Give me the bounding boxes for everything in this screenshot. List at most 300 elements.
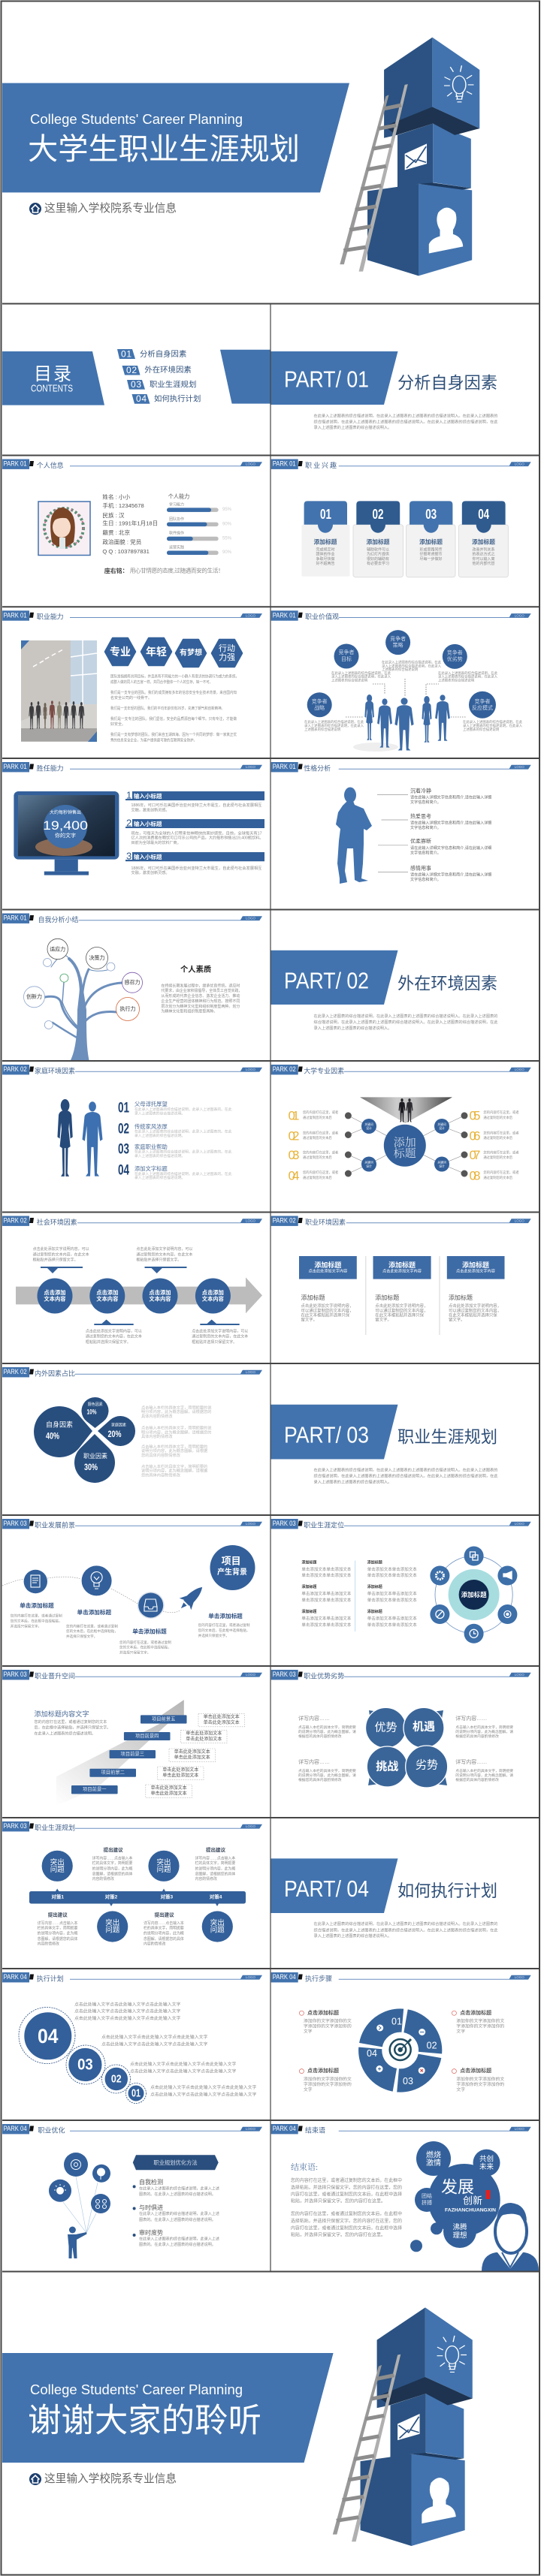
slide header bbox=[271, 610, 531, 621]
motto: 座右铭： bbox=[104, 567, 128, 574]
part title: 外在环境因素 bbox=[397, 975, 497, 993]
petal labels: 20% bbox=[108, 1429, 122, 1439]
swot labels bbox=[374, 1721, 438, 1773]
column text: 可以通过复制您的文本内容， bbox=[375, 1308, 428, 1314]
strategy labels bbox=[51, 1894, 222, 1900]
part description: 综合描述说明，在此录入上述图表的上述图表的综合描述说明入。在此录入上述图表的综合描述说明，在此 bbox=[314, 1473, 498, 1479]
swot titles: 详写内容…… bbox=[298, 1715, 330, 1722]
slide header bbox=[2, 1216, 262, 1226]
slide header: PARK 04 bbox=[273, 2125, 296, 2133]
ability bars: 团队协作 bbox=[169, 517, 184, 522]
ability bars: 55% bbox=[222, 536, 232, 541]
slide header bbox=[271, 1972, 531, 1982]
swot titles: 详写内容…… bbox=[455, 1715, 487, 1722]
method text bbox=[139, 2186, 219, 2247]
value labels: 竞争者 bbox=[475, 698, 490, 704]
slide header: PARK 04 bbox=[273, 1973, 296, 1981]
pinwheel bbox=[358, 2008, 443, 2092]
slide header: 执行计划 bbox=[37, 1974, 64, 1982]
positioning titles: 添加标题 bbox=[367, 1609, 382, 1614]
part title: 如何执行计划 bbox=[397, 1882, 497, 1900]
execution text: 点击此处输入文字点击此处输入文字点击此处输入文字 bbox=[130, 2068, 236, 2074]
petal labels: 40% bbox=[46, 1431, 59, 1442]
number captions: 通过复制您的文本后 bbox=[483, 1155, 513, 1160]
family titles bbox=[134, 1101, 168, 1172]
dotted path bbox=[2, 1577, 180, 1613]
orange numbers: 08 bbox=[469, 1169, 481, 1183]
icon: cube tower with ladder bbox=[340, 38, 479, 276]
swot text: 的说明分项内容，此为概念图解，请 bbox=[298, 1773, 356, 1778]
slide header: 职业优化 bbox=[38, 2126, 65, 2134]
slide header: 职业兴趣 bbox=[305, 461, 337, 469]
swot text: 根据您的具体内容酌情修改 bbox=[455, 1734, 499, 1739]
callout text: 通过复制您的文本内容，在此文本 bbox=[136, 1252, 192, 1257]
milestone titles bbox=[20, 1601, 243, 1635]
callout text: 点击此处添加文字说明内容，可以 bbox=[86, 1329, 142, 1334]
slide header: PARK 01 bbox=[273, 460, 296, 469]
problem labels bbox=[50, 1857, 225, 1934]
value descriptions: 上述图表的综合描述说明 bbox=[331, 677, 368, 683]
monitor stat: 大约每秒钟售出 bbox=[50, 809, 81, 815]
number captions: 通过复制您的文本后 bbox=[303, 1135, 332, 1140]
ability description: 秀的信息安全企业，为客户提供最可靠的互联网安全防护。 bbox=[110, 737, 197, 743]
note text: 单击此处添加文本 bbox=[151, 1785, 187, 1791]
icon: target bbox=[390, 2039, 411, 2060]
strategy labels: 对策2 bbox=[105, 1894, 118, 1900]
trait list: 文字信息和简介。 bbox=[410, 850, 441, 856]
slide header: LOGO bbox=[515, 613, 524, 617]
suggestion headings: 提出建议 bbox=[104, 1846, 123, 1853]
closing text: 粘贴，并选择只保留文字。您的内容打在这里。 bbox=[291, 2198, 385, 2204]
card 02 bbox=[353, 501, 403, 577]
value labels: 目标 bbox=[341, 655, 352, 662]
personal details: 民族 : 汉 bbox=[102, 511, 125, 519]
pinwheel numbers: 02 bbox=[427, 2041, 437, 2051]
milestone text: 您的文本后，在此框中选择粘贴， bbox=[11, 1619, 62, 1623]
value labels: 反应模式 bbox=[472, 704, 493, 711]
part description: 录入上述图表的上述图表的综合描述说明入。 bbox=[314, 1933, 391, 1939]
positioning titles: 添加标题 bbox=[367, 1559, 382, 1565]
panel: personal info bbox=[2, 459, 262, 574]
circle numbers: 01 bbox=[131, 2087, 141, 2099]
network labels: 关键词 bbox=[437, 1161, 446, 1164]
closing english: College Students' Career Planning bbox=[30, 2382, 243, 2397]
family numbers: 01 bbox=[118, 1101, 129, 1116]
panel: factor share bbox=[2, 1367, 262, 1483]
competence text: 交融，激发创新灵感。 bbox=[131, 808, 169, 812]
competence bars: 2 bbox=[126, 817, 131, 829]
figure holding balloons bbox=[68, 2227, 87, 2258]
value labels: 竞争者 bbox=[338, 649, 355, 655]
column text: 添加标题 bbox=[301, 1294, 325, 1301]
panel: career interest bbox=[271, 459, 531, 577]
milestone titles: 单击添加标题 bbox=[20, 1601, 54, 1609]
slide header: PARK 04 bbox=[4, 1973, 27, 1981]
panel: family environment bbox=[2, 1065, 262, 1180]
card 03: 尽每一步做好 bbox=[419, 556, 443, 562]
swot titles: 详写内容…… bbox=[455, 1758, 487, 1765]
positioning text: 单击添加文本单击添加文本 bbox=[301, 1566, 352, 1572]
petal labels: 30% bbox=[84, 1462, 98, 1472]
note text: 单击此处添加文本 bbox=[151, 1790, 187, 1796]
card 02: 02 bbox=[373, 507, 383, 522]
slide header bbox=[2, 1065, 262, 1074]
silhouettes: couple bbox=[57, 1099, 102, 1177]
network circles bbox=[361, 1119, 449, 1171]
suggestion text: 内容酌情修改 bbox=[92, 1876, 114, 1882]
suggestion text: 念图解，请根据您的具体 bbox=[144, 1936, 184, 1942]
icon: bulb bbox=[91, 1572, 102, 1589]
step titles: 点击添加标题 bbox=[307, 2009, 339, 2016]
contents heading bbox=[31, 364, 73, 393]
dividers bbox=[366, 1256, 440, 1335]
panel: execution steps bbox=[271, 1972, 531, 2092]
value descriptions: 在此录入上述图表的综合描述说明，在此 bbox=[331, 670, 391, 676]
trait list: 沉着冷静 bbox=[410, 787, 431, 794]
slide header: PARK 03 bbox=[4, 1520, 27, 1528]
card 03: 形成思路同传 bbox=[419, 547, 443, 552]
family titles: 家庭职业帮助 bbox=[134, 1143, 168, 1150]
note text: 单击此处添加文本 bbox=[186, 1736, 222, 1742]
slide header: PARK 03 bbox=[4, 1822, 27, 1830]
step titles: 点击添加标题 bbox=[460, 2067, 491, 2074]
hexagon labels: 有梦想 bbox=[180, 647, 202, 658]
part banner bbox=[270, 1858, 398, 1913]
card 01 bbox=[301, 501, 350, 577]
strategy labels: 对策1 bbox=[51, 1894, 64, 1900]
factor descriptions: 点击输入本栏的具体文字，简明扼要的说 bbox=[141, 1425, 211, 1431]
factor descriptions: 具体内容酌情修改 bbox=[141, 1413, 173, 1419]
step boxes bbox=[71, 1715, 186, 1794]
positioning text: 单击添加文本单击添加文本 bbox=[301, 1572, 352, 1578]
number captions: 您的内容打在这里，或者 bbox=[483, 1110, 519, 1115]
panel: part 02 bbox=[270, 951, 498, 1031]
swot text: 的说明分项内容，此为概念图解，请 bbox=[298, 1729, 356, 1734]
hexagon labels: 行动 bbox=[219, 643, 235, 653]
bubble labels: 团结 bbox=[422, 2192, 432, 2199]
method text: 在此录入上述图表的综合描述说明，此录入上述 bbox=[139, 2211, 219, 2216]
slide header bbox=[2, 2124, 262, 2134]
step labels: 项目前景三 bbox=[121, 1750, 144, 1757]
milestone titles: 单击添加标题 bbox=[208, 1612, 243, 1619]
slide header: 社会环境因素 bbox=[37, 1218, 77, 1226]
network labels: 添加 bbox=[394, 1137, 416, 1149]
icon: document bbox=[31, 1575, 40, 1587]
note text: 单击此处添加文本 bbox=[162, 1767, 198, 1773]
panel: closing slide bbox=[2, 2307, 473, 2546]
swot text: 点击输入本栏的具体文字，简明扼要 bbox=[298, 1768, 356, 1773]
hub label: 添加标题 bbox=[461, 1591, 487, 1598]
suggestion text: 栏的具体文字，简明扼要 bbox=[92, 1860, 133, 1866]
slide header: LOGO bbox=[515, 1068, 524, 1071]
callout text: 框粘贴并选择只保留文字。 bbox=[33, 1258, 78, 1263]
callout text: 框粘贴并选择只保留文字。 bbox=[136, 1258, 181, 1263]
execution text: 点击此处输入文字点击此处输入文字点击此处输入文字 bbox=[74, 2008, 180, 2014]
network labels: 标题 bbox=[394, 1147, 416, 1160]
petal labels: 自身因素 bbox=[46, 1421, 73, 1429]
method titles bbox=[139, 2178, 163, 2236]
network labels: 设计 bbox=[366, 1126, 372, 1130]
positioning text: 单击添加文本单击添加文本 bbox=[367, 1591, 417, 1597]
family text: 在此录入上述图表的综合描述说明，此录入上述图表的。在此 bbox=[134, 1149, 232, 1155]
slide header: LOGO bbox=[246, 1522, 256, 1526]
tree bbox=[45, 955, 122, 1060]
slide header bbox=[2, 1972, 262, 1982]
box labels: 点击此处添加文字内容 bbox=[382, 1267, 422, 1273]
bubble labels: FAZHANCHUANGXIN bbox=[445, 2207, 496, 2213]
icon: cube tower with ladder bbox=[333, 2307, 473, 2546]
pinwheel numbers: 03 bbox=[403, 2076, 413, 2086]
part label: PART/ 03 bbox=[284, 1422, 369, 1448]
factor descriptions bbox=[141, 1404, 211, 1478]
family titles: 添加文字标题 bbox=[134, 1165, 168, 1172]
slide header: LOGO bbox=[246, 916, 256, 920]
suggestion text: 的说明分项内容，此为概 bbox=[38, 1931, 78, 1936]
step text: 文字 bbox=[304, 2086, 313, 2092]
slide header: LOGO bbox=[246, 1824, 256, 1828]
number captions: 通过复制您的文本后 bbox=[303, 1155, 332, 1160]
milestone text: 您的文本后，在此框中选择粘贴， bbox=[66, 1628, 118, 1634]
step labels: 项目前景一 bbox=[83, 1785, 107, 1792]
milestone titles: 单击添加标题 bbox=[132, 1628, 167, 1635]
suggestion headings: 提出建议 bbox=[206, 1846, 225, 1853]
orange numbers: 05 bbox=[469, 1108, 481, 1123]
execution text: 点击此处输入文字点击此处输入文字点击此处输入文字 bbox=[101, 2034, 207, 2040]
value descriptions: 在此录入上述图表的综合描述说明，在此 bbox=[304, 719, 364, 725]
competence bars: 输入小标题 bbox=[134, 820, 162, 827]
ability bars bbox=[167, 493, 232, 555]
suggestion text: 内容酌情修改 bbox=[38, 1942, 59, 1947]
column text: 留文字。 bbox=[375, 1317, 391, 1323]
tree labels: 执行力 bbox=[120, 1005, 135, 1012]
step titles: 点击添加标题 bbox=[460, 2009, 491, 2016]
note text: 单击此处添加文本 bbox=[204, 1713, 240, 1719]
timeline labels: 点击添加 bbox=[44, 1289, 66, 1296]
value labels: 竞争者 bbox=[390, 635, 406, 642]
slide header: 职业环境因素 bbox=[305, 1218, 346, 1226]
ability bars: 运营实践 bbox=[169, 544, 184, 550]
card 04: 添加标题 bbox=[472, 538, 495, 545]
panel: part 03 bbox=[270, 1405, 498, 1485]
competence bars: 1 bbox=[126, 790, 131, 800]
slide header bbox=[2, 1367, 262, 1377]
red seal bbox=[485, 2190, 490, 2199]
hexagon labels: 年轻 bbox=[146, 646, 167, 658]
slide header bbox=[2, 913, 262, 923]
callout text: 点击此处添加文字说明内容，可以 bbox=[136, 1246, 192, 1252]
part description: 综合描述说明，在此录入上述图表的上述图表的综合描述说明入。在此录入上述图表的综合描述说明，在此 bbox=[314, 1927, 498, 1933]
timeline labels bbox=[44, 1289, 225, 1302]
dashed rings bbox=[19, 2008, 146, 2104]
team photo bbox=[21, 640, 97, 742]
slide header: PARK 03 bbox=[273, 1520, 296, 1528]
slide header: PARK 02 bbox=[273, 1217, 296, 1225]
part banner bbox=[270, 951, 398, 1005]
milestone text: 您的内容打在这里，或者通过复制 bbox=[11, 1613, 62, 1619]
value descriptions: 在此录入上述图表的综合描述说明，在此 bbox=[382, 659, 442, 665]
panel: execution plan bbox=[2, 1972, 262, 2104]
hexagon labels: 力强 bbox=[219, 652, 235, 662]
competence bars: 输入小标题 bbox=[134, 853, 162, 860]
slide header: PARK 01 bbox=[4, 763, 27, 771]
number captions: 通过复制您的文本后 bbox=[303, 1115, 332, 1120]
execution text: 点击此处输入文字点击此处输入文字点击此处输入文字 bbox=[101, 2041, 207, 2047]
network labels bbox=[364, 1122, 446, 1168]
family text: 录入上述图表的综合描述说明。 bbox=[134, 1153, 185, 1158]
positioning text: 单击添加文本单击添加文本 bbox=[301, 1622, 352, 1628]
part description bbox=[314, 413, 498, 430]
problem labels: 问题 bbox=[210, 1925, 225, 1934]
slide header: 职业价值观 bbox=[305, 613, 339, 621]
network dots bbox=[345, 1112, 467, 1177]
network labels: 设计 bbox=[439, 1164, 445, 1168]
slide header: LOGO bbox=[246, 765, 256, 769]
contents items: 03 bbox=[131, 379, 141, 390]
number captions: 您的内容打在这里，或者 bbox=[303, 1149, 339, 1155]
team silhouettes bbox=[353, 694, 450, 752]
note text: 单击此处添加文本 bbox=[186, 1730, 222, 1736]
panel: career positioning bbox=[271, 1519, 531, 1644]
panel: career ability bbox=[2, 610, 262, 743]
value descriptions: 录入上述图表的综合描述说明，在此录入 bbox=[304, 723, 364, 728]
part title: 分析自身因素 bbox=[397, 374, 497, 392]
swot circles bbox=[365, 1707, 448, 1788]
strategy labels: 对策4 bbox=[210, 1894, 222, 1900]
network labels: 关键词 bbox=[437, 1122, 446, 1126]
factor descriptions: 点击输入本栏的具体文字，简明扼要的说 bbox=[141, 1404, 211, 1410]
personal details: 手机 : 12345678 bbox=[102, 502, 144, 509]
contents heading: 目录 bbox=[34, 364, 71, 384]
family text bbox=[134, 1107, 232, 1180]
step labels: 项目前景四 bbox=[135, 1732, 159, 1739]
suggestion headings bbox=[48, 1846, 225, 1918]
competence text: 目前为全球最大的饮料厂商。 bbox=[131, 840, 181, 845]
factor descriptions: 点击输入本栏的具体文字，简明扼要的 bbox=[141, 1443, 207, 1449]
slide header bbox=[271, 1670, 531, 1680]
method titles: 自我检测 bbox=[139, 2178, 163, 2186]
note text: 单击此处添加文本 bbox=[174, 1754, 210, 1760]
slide header: PARK 03 bbox=[4, 1671, 27, 1679]
family text: 录入上述图表的综合描述说明。 bbox=[134, 1175, 185, 1180]
slide header: LOGO bbox=[515, 2127, 524, 2131]
competence text: 现在，可每天为全球的人们带来怡神畅快的美妙感受。目前，全球每天有17 bbox=[131, 830, 262, 836]
number captions: 通过复制您的文本后 bbox=[483, 1135, 513, 1140]
slide header: 职业能力 bbox=[37, 613, 64, 621]
quality text: 企业生产经营的团体精神和行为规范。按照不同 bbox=[161, 999, 240, 1004]
value descriptions: 在此录入上述图表的综合描述说明，在此 bbox=[438, 670, 498, 676]
step text: 添加你的文字添加你的文 bbox=[304, 2076, 352, 2082]
slide header bbox=[2, 459, 262, 469]
part title: 职业生涯规划 bbox=[397, 1428, 497, 1446]
ability bars: 学习能力 bbox=[169, 502, 184, 508]
quality text: 层次划分为精神文化型和组织制度型两种。划分 bbox=[161, 1004, 240, 1009]
box labels: 添加标题 bbox=[388, 1261, 416, 1269]
positioning text: 单击添加文本单击添加文本 bbox=[367, 1566, 417, 1572]
card 01: 完成规定时 bbox=[316, 547, 335, 552]
suggestion text bbox=[38, 1855, 235, 1947]
family text: 在此录入上述图表的综合描述说明，此录入上述图表的。在此 bbox=[134, 1129, 232, 1134]
step text: 添加你的文字添加你的文 bbox=[304, 2017, 352, 2023]
monitor bbox=[14, 791, 119, 875]
execution text: 点击此处输入文字点击此处输入文字点击此处输入文字 bbox=[150, 2092, 256, 2098]
positioning titles: 添加标题 bbox=[301, 1584, 316, 1589]
trait list: 优柔寡断 bbox=[410, 838, 431, 844]
card 04: 你可以输入离 bbox=[472, 556, 495, 562]
column text: 留文字。 bbox=[449, 1317, 465, 1323]
method label: 职业规划优化方法 bbox=[153, 2159, 198, 2166]
suggestion text: 详写内容……点击输入本 bbox=[92, 1855, 133, 1860]
slide header: 职业晋升空间 bbox=[35, 1671, 75, 1680]
panel: career values bbox=[271, 610, 531, 752]
part description: 录入上述图表的上述图表的综合描述说明入。 bbox=[314, 1479, 391, 1485]
slide header bbox=[2, 1519, 262, 1529]
panel: competence bbox=[2, 762, 264, 875]
part banner bbox=[270, 1405, 398, 1460]
strategy bar bbox=[29, 1889, 246, 1906]
number captions: 您的内容打在这里，或者 bbox=[483, 1130, 519, 1135]
contents items: 职业生涯规划 bbox=[150, 379, 196, 389]
milestone text: 并选择只保留文字。 bbox=[66, 1634, 97, 1639]
factor descriptions: 说明分项内容，此为概念图解，请根据 bbox=[141, 1448, 207, 1454]
suggestion text: 念图解，请根据您的具体 bbox=[92, 1871, 133, 1876]
competence text bbox=[131, 803, 263, 875]
slide header: PARK 04 bbox=[4, 2125, 27, 2133]
execution text bbox=[74, 2002, 256, 2098]
value descriptions: 录入上述图表的综合描述说明，在此录入 bbox=[438, 674, 498, 679]
card 01: 争取尽快做 bbox=[316, 556, 335, 562]
value labels: 竞争者 bbox=[312, 698, 328, 704]
problem labels: 问题 bbox=[50, 1865, 65, 1874]
trait list: 感情用事 bbox=[410, 864, 431, 871]
network labels: 设计 bbox=[439, 1126, 445, 1130]
step text: 字添加你的文字添加你的 bbox=[456, 2081, 504, 2087]
suggestion text: 的说明分项内容，此为概 bbox=[195, 1866, 235, 1871]
suggestion text: 念图解，请根据您的具体 bbox=[38, 1936, 78, 1942]
slide header: PARK 02 bbox=[4, 1368, 27, 1376]
silhouette: arms crossed bbox=[336, 787, 372, 884]
number captions: 您的内容打在这里，或者 bbox=[483, 1170, 519, 1175]
panel: cover slide bbox=[2, 38, 479, 276]
slide header: LOGO bbox=[246, 613, 256, 617]
part description bbox=[314, 1466, 498, 1485]
swot text: 点击输入本栏的具体文字，简明扼要 bbox=[298, 1725, 356, 1730]
motto: 用心甘情愿的态度,过随遇而安的生活！ bbox=[130, 566, 224, 574]
panel: part 04 bbox=[270, 1858, 498, 1939]
trait list: 文字信息和简介。 bbox=[410, 825, 441, 830]
card 03: 03 bbox=[425, 507, 437, 522]
milestone text: 您的内容打在这里，或者通过复制 bbox=[198, 1622, 250, 1628]
personal details: 姓名 : 小小 bbox=[102, 493, 131, 500]
orange numbers: 06 bbox=[469, 1129, 481, 1143]
bubble labels: 拼搏 bbox=[422, 2199, 432, 2206]
suggestion text: 详写内容……点击输入本 bbox=[144, 1921, 184, 1926]
pinwheel numbers bbox=[367, 2017, 437, 2086]
positioning text: 单击添加文本单击添加文本 bbox=[301, 1597, 352, 1603]
project background label: 产生背景 bbox=[217, 1567, 247, 1577]
number captions: 您的内容打在这里，或者 bbox=[303, 1130, 339, 1135]
positioning text: 单击添加文本单击添加文本 bbox=[367, 1597, 417, 1603]
circle numbers bbox=[38, 2025, 141, 2099]
advancement heading: 添加标题内容文字 bbox=[35, 1710, 89, 1718]
column text bbox=[301, 1294, 501, 1323]
slide header: 大学专业因素 bbox=[304, 1066, 344, 1074]
card 03: 添加标题 bbox=[419, 538, 443, 545]
value labels bbox=[312, 635, 493, 711]
slide header: LOGO bbox=[515, 765, 524, 769]
project background label: 项目 bbox=[222, 1556, 241, 1566]
orange numbers: 02 bbox=[289, 1129, 299, 1143]
factor descriptions: 具体内容酌情修改 bbox=[141, 1433, 173, 1439]
